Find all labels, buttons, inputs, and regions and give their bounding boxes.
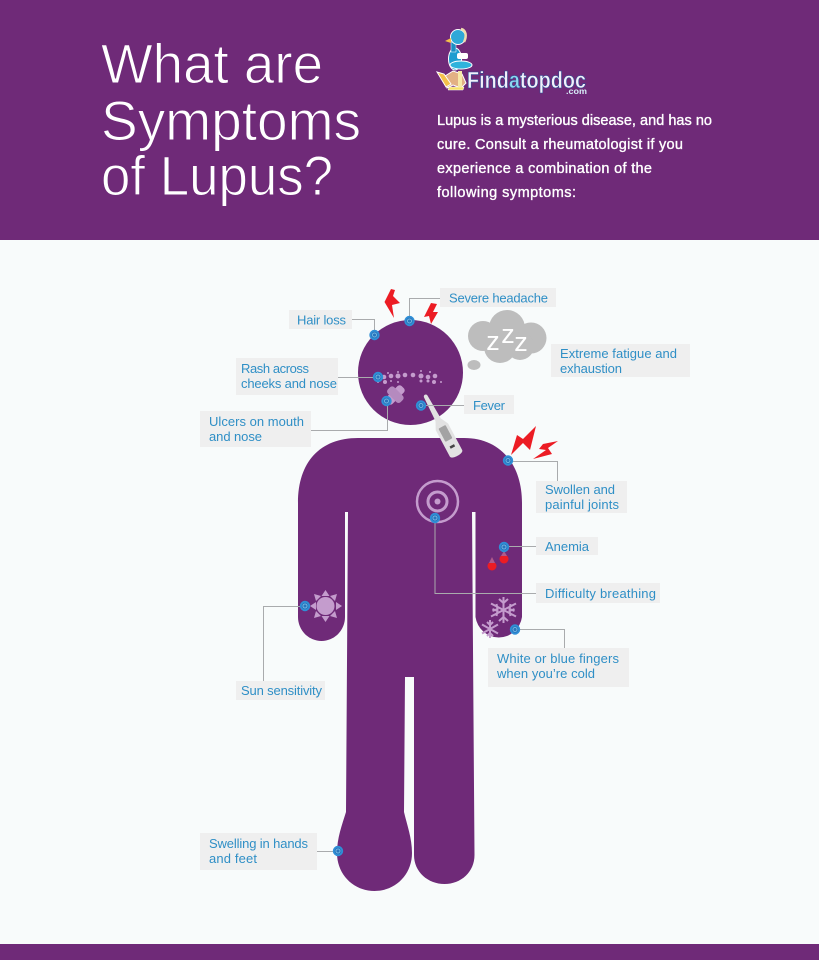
logo: Findatopdoc: .com [566, 86, 587, 96]
label: white or blue fingers: when you’re cold [496, 666, 595, 681]
footer band [0, 944, 819, 960]
label: sun sensitivity: Sun sensitivity [241, 683, 322, 698]
icon: blood drops [488, 551, 508, 570]
label: fever: Fever [473, 398, 506, 413]
icon: fatigue cloud: z [514, 327, 528, 357]
label: swelling: Swelling in hands [209, 836, 308, 851]
label: swollen joints: Swollen and [545, 482, 615, 497]
icon: rash dots [377, 370, 442, 384]
logo: Findatopdoc: Findatopdoc [467, 67, 586, 93]
icon: sun [310, 590, 342, 622]
title: What are [101, 32, 323, 95]
label: hair loss: Hair loss [297, 312, 346, 328]
title [101, 32, 361, 207]
label: fever [417, 395, 514, 414]
label: white or blue fingers: White or blue fingers [497, 651, 620, 666]
label: rash: Rash across [241, 361, 310, 376]
human figure [298, 320, 522, 891]
label: severe headache: Severe headache [449, 290, 548, 306]
intro text: Lupus is a mysterious disease, and has no [437, 113, 712, 129]
intro text: experience a combination of the [437, 161, 652, 177]
title: of Lupus? [101, 144, 333, 207]
icon: ulcer bandage [381, 381, 409, 409]
icon: snowflakes [482, 597, 516, 638]
label: swelling: and feet [209, 851, 257, 866]
label: ulcers: Ulcers on mouth [209, 414, 304, 429]
label: difficulty breathing: Difficulty breathing [545, 586, 656, 601]
label: sun sensitivity [236, 602, 325, 700]
label: swollen joints [504, 456, 627, 513]
header band [0, 0, 819, 240]
label: extreme fatigue: exhaustion [560, 361, 622, 376]
logo: Findatopdoc [437, 29, 587, 96]
label: swelling [200, 833, 342, 870]
label: extreme fatigue [551, 344, 690, 377]
icon: fatigue cloud: z [501, 319, 515, 349]
icon: fatigue cloud [468, 310, 546, 370]
label: swollen joints: painful joints [545, 497, 620, 512]
label: hair loss [289, 310, 379, 339]
label: anemia [500, 537, 598, 555]
icon: joint pain bolts [511, 426, 558, 459]
icon: breathing target [417, 481, 458, 522]
label: difficulty breathing [431, 514, 660, 603]
label: white or blue fingers [488, 625, 629, 687]
label: severe headache [405, 288, 556, 325]
icon: thermometer [419, 391, 464, 459]
label: ulcers [200, 397, 391, 447]
intro text: following symptoms: [437, 185, 576, 201]
icon: fatigue cloud: z [486, 326, 500, 356]
label: ulcers: and nose [209, 429, 262, 444]
label: anemia: Anemia [545, 539, 590, 554]
label: rash [236, 358, 382, 395]
label: extreme fatigue: Extreme fatigue and [560, 346, 677, 361]
label: rash: cheeks and nose [241, 376, 337, 391]
intro text [437, 113, 712, 201]
intro text: cure. Consult a rheumatologist if you [437, 137, 683, 153]
icon: headache bolts [384, 289, 438, 324]
title: Symptoms [101, 89, 361, 152]
